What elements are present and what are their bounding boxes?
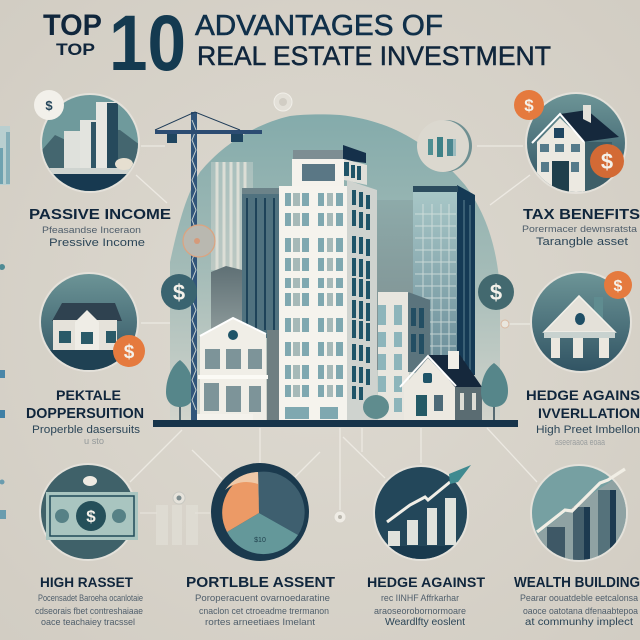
text: property diversification description: u sto (84, 436, 104, 447)
dollar coin right (478, 274, 514, 310)
text: tax benefits description: Tarangble asset (536, 236, 628, 248)
heading: passive income: PASSIVE INCOME (29, 206, 171, 223)
heading: hedge against inflation (526, 387, 640, 421)
title: 10 (109, 0, 186, 87)
central city illustration (153, 93, 518, 427)
heading: hedge against inflation: IVVERLLATION (538, 405, 640, 421)
text: hedge against description: rec IINHF Affrkarhar (381, 593, 459, 604)
faint stepped bars between money and pie (156, 505, 198, 545)
title: TOP (43, 9, 102, 42)
platform (153, 420, 518, 427)
text: tax benefits description (522, 224, 638, 248)
text: high asset description: Pocensadet Baroeha ocanlotaie (38, 593, 143, 604)
title: TOP (56, 40, 95, 59)
right small house (400, 351, 482, 420)
text: property diversification description (32, 424, 141, 447)
text: portable asset description (195, 593, 330, 628)
panel: portable asset pie chart (211, 463, 309, 561)
heading: portable asset: PORTLBLE ASSENT (186, 575, 335, 591)
text: passive income description: Pfeasandse Inceraon (42, 225, 141, 236)
title: REAL ESTATE INVESTMENT (197, 41, 551, 71)
trees (166, 360, 508, 420)
heading: high asset: HIGH RASSET (40, 574, 133, 590)
panel: passive income (34, 90, 140, 196)
panel: wealth building chart (530, 464, 628, 563)
panel: tax benefits: $ (524, 96, 534, 115)
bush (363, 395, 389, 419)
text: wealth building description: at communhy implect (525, 617, 633, 628)
title: ADVANTAGES OF (195, 10, 443, 42)
text: hedge description: aseeraaoa eoaa (555, 437, 606, 448)
arch backdrop (170, 114, 500, 420)
text: tax benefits description: Porermacer dewnsratsta (522, 224, 638, 235)
panel: hedge against growth chart (373, 465, 471, 562)
small grey medallion (274, 93, 292, 111)
mid building (378, 292, 430, 420)
panel: high asset: $ (86, 507, 96, 526)
foggy middle ground (372, 200, 416, 370)
text: hedge against description (374, 593, 466, 628)
dollar coin left: $ (173, 280, 185, 305)
connector lines (130, 146, 537, 513)
text: portable asset description: Poroperacuent ovarnoedaratine (195, 593, 330, 604)
panel: tax benefits (514, 90, 627, 194)
glass tower right (413, 185, 475, 375)
text: portable asset description: cnaclon cet ctroeadme trermanon (199, 606, 329, 617)
heading: property diversification (26, 387, 144, 422)
main tower (279, 145, 377, 420)
panel: property diversification: $ (124, 342, 135, 363)
text: high asset description (35, 593, 143, 628)
panel: tax benefits: $ (601, 149, 613, 174)
dark striped tower (242, 188, 279, 338)
text: property diversification description: Properble dasersuits (32, 424, 141, 436)
main tower windows (285, 193, 324, 397)
text: portable asset description: rortes arneetiaes Imelant (205, 617, 315, 628)
text: hedge description: High Preet Imbellon (536, 424, 640, 436)
grey tower (211, 266, 242, 335)
title (43, 0, 551, 87)
left edge cropped chart (0, 126, 10, 519)
heading: hedge against: HEDGE AGAINST (367, 574, 485, 590)
dollar coin left (161, 274, 197, 310)
heading: hedge against inflation: HEDGE AGAINS (526, 387, 640, 403)
panel: hedge against inflation: $ (614, 278, 623, 295)
panel: portable asset pie chart: $10 (254, 537, 266, 544)
panel: passive income: $ (45, 98, 53, 113)
small connector rings (173, 98, 346, 523)
text: high asset description: oace teachaiey tracssel (41, 617, 135, 628)
text: wealth building description (520, 593, 639, 628)
pale striped tower (211, 162, 253, 270)
panel: hedge against inflation (501, 271, 632, 374)
text: hedge against description: araoseorobornormoare (374, 606, 466, 617)
dollar coin right: $ (490, 280, 502, 305)
left townhouse (193, 318, 279, 420)
text: high asset description: cdseorais fbet contreshaiaae (35, 606, 143, 617)
heading: tax benefits: TAX BENEFITS (523, 206, 640, 223)
orange ring medallion (183, 225, 215, 257)
crane (155, 112, 262, 420)
heading: property diversification: DOPPERSUITION (26, 405, 144, 422)
text: passive income description: Pressive Income (49, 237, 145, 249)
bar icon medallion (417, 120, 472, 172)
heading: property diversification: PEKTALE (56, 387, 121, 403)
panel: high asset (40, 464, 138, 560)
text: hedge description (536, 424, 640, 448)
text: passive income description (42, 225, 145, 249)
panel: property diversification (39, 272, 145, 375)
text: hedge against description: Weardlfty eoslent (385, 617, 465, 628)
